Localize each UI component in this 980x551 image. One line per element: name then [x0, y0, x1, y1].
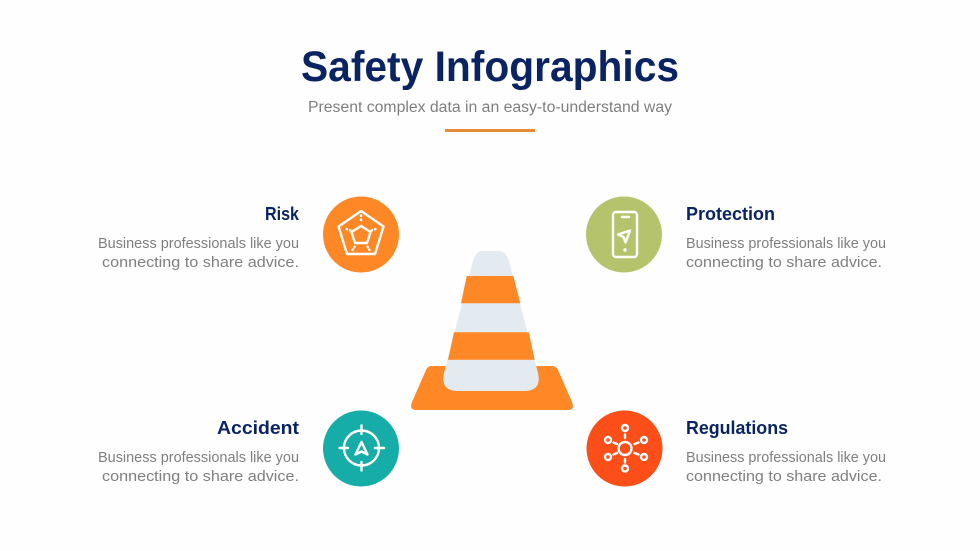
item: Regulations	[586, 410, 886, 486]
heading: Regulations: Regulations	[686, 418, 788, 438]
traffic cone	[411, 251, 573, 410]
title: Safety Infographics	[301, 43, 679, 91]
text: Risk description: connecting to share advice.	[102, 254, 299, 271]
item: Risk	[98, 196, 399, 272]
text: Protection description: connecting to share advice.	[686, 254, 882, 271]
subtitle: Present complex data in an easy-to-understand way	[308, 99, 672, 116]
title underline	[445, 129, 535, 132]
icon: target with arrow	[323, 410, 399, 486]
heading: Accident: Accident	[217, 418, 299, 438]
text: Protection description	[686, 235, 886, 271]
text: Regulations description	[686, 449, 886, 485]
icon: pentagon radar	[323, 196, 399, 272]
item: Protection	[586, 196, 886, 272]
icon: network hub	[586, 410, 662, 486]
text: Accident description	[98, 449, 299, 485]
text: Risk description	[98, 235, 299, 271]
text: Risk description: Business professionals like you	[98, 235, 299, 252]
text: Regulations description: connecting to share advice.	[686, 468, 882, 485]
heading: Risk: Risk	[265, 204, 300, 224]
text: Regulations description: Business professionals like you	[686, 449, 886, 466]
text: Accident description: connecting to share advice.	[102, 468, 299, 485]
text: Protection description: Business professionals like you	[686, 235, 886, 252]
icon: phone with navigation arrow	[586, 196, 662, 272]
text: Accident description: Business professionals like you	[98, 449, 299, 466]
item: Accident	[98, 410, 399, 486]
heading: Protection: Protection	[686, 204, 775, 224]
